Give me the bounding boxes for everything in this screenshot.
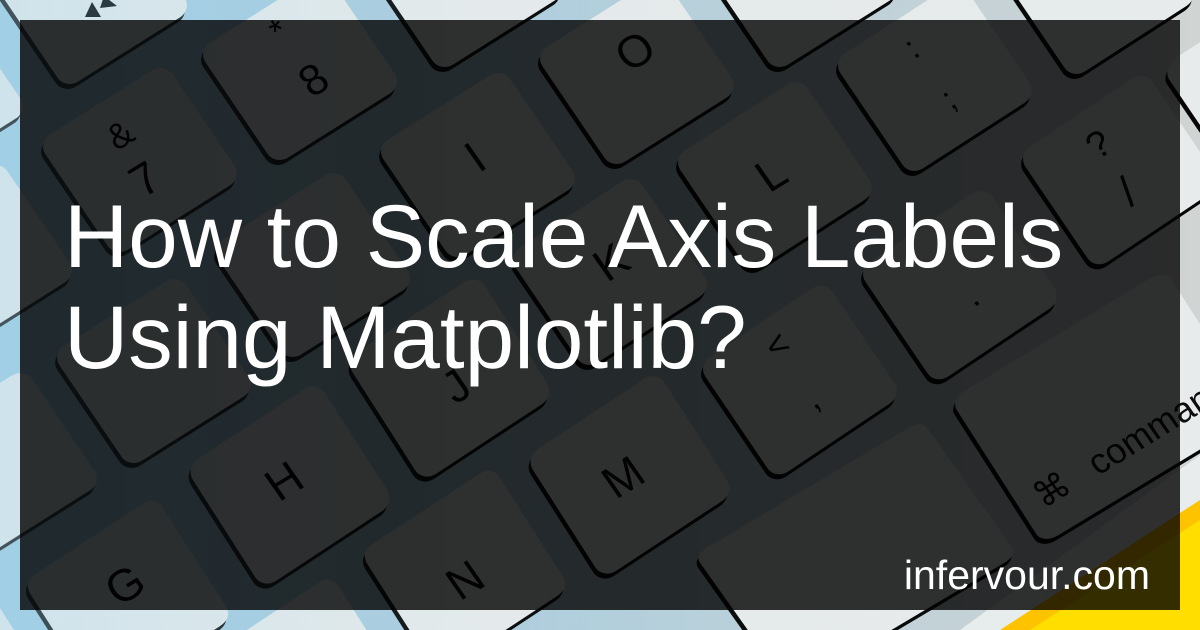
background photo: keyboard close-up: ; [934,81,964,117]
title: Using Matplotlib? [64,287,747,387]
background photo: keyboard close-up: . [955,275,987,314]
background photo: keyboard close-up: & [98,112,142,158]
background photo: keyboard close-up: I [455,132,495,182]
background photo: keyboard close-up: L [745,146,797,202]
background photo: keyboard close-up: H [255,451,313,511]
background photo: keyboard close-up: , [795,378,827,417]
background photo: keyboard close-up: ? [1078,122,1120,168]
background photo: keyboard close-up: 8 [289,54,338,107]
background photo: keyboard close-up: O [605,20,665,82]
background photo: keyboard close-up: : [897,30,927,66]
background photo: keyboard close-up: 7 [119,151,171,207]
background photo: keyboard close-up: K [583,232,639,291]
background photo: keyboard close-up: / [1109,168,1148,215]
background photo: keyboard close-up: G [95,554,155,616]
background photo: keyboard close-up: J [431,358,480,413]
title: How to Scale Axis Labels [64,186,1063,286]
background photo: keyboard close-up: N [436,550,494,610]
title [64,186,1063,387]
background photo: keyboard close-up: < [756,322,798,367]
background photo: keyboard close-up: M [592,446,654,508]
background photo: keyboard close-up: ⌘ [1025,464,1079,516]
background photo: keyboard close-up: * [262,12,295,50]
brand: website name: infervour.com [904,552,1150,598]
